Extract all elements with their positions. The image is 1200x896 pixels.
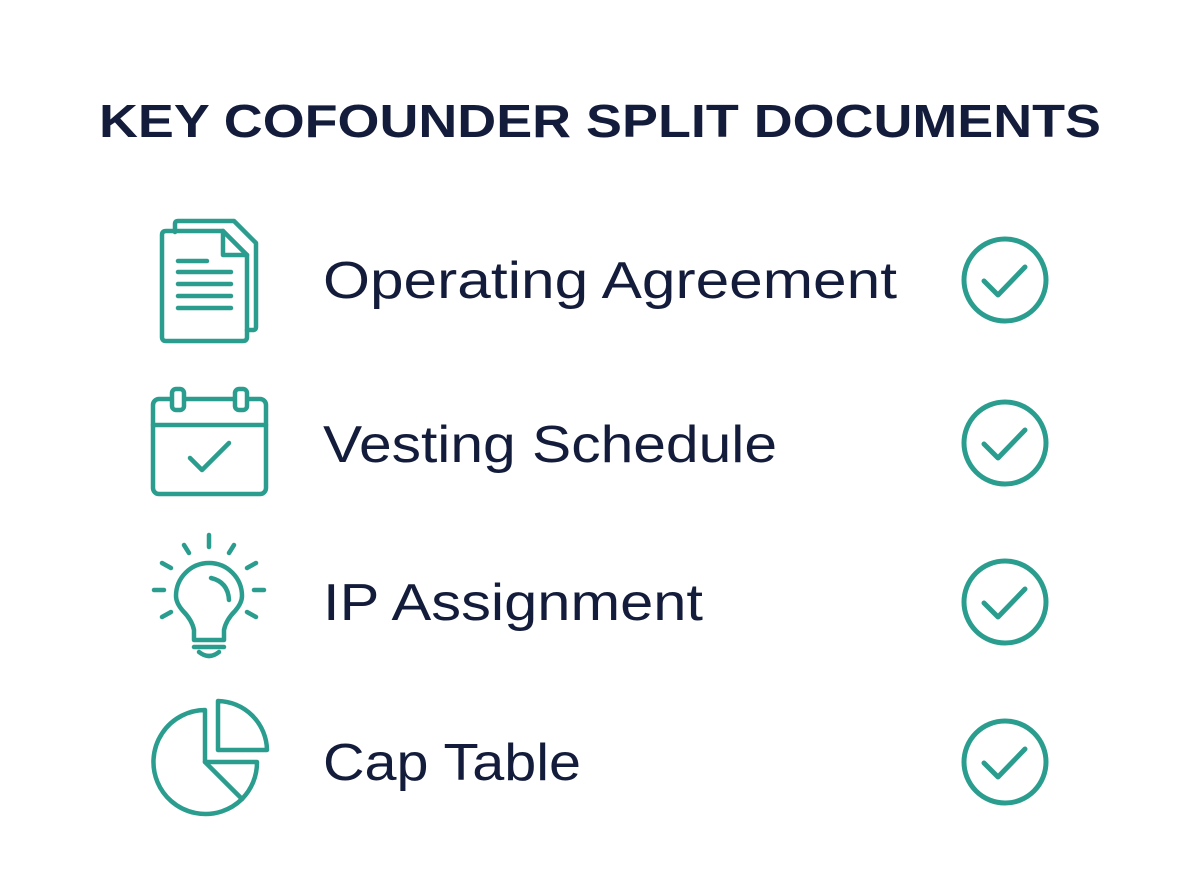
icon: check circle xyxy=(964,239,1046,321)
row: operating agreement xyxy=(162,221,1046,341)
icon: pie chart xyxy=(153,701,267,814)
label text: Cap Table xyxy=(323,734,581,792)
row: cap table xyxy=(153,701,1046,814)
icon: light bulb xyxy=(154,535,264,656)
icon: check circle xyxy=(964,561,1046,643)
row: vesting schedule xyxy=(153,389,1046,494)
icon: check circle xyxy=(964,402,1046,484)
label text: IP Assignment xyxy=(323,574,704,632)
icon: documents xyxy=(162,221,256,341)
icon: check circle xyxy=(964,721,1046,803)
label text: Vesting Schedule xyxy=(323,416,777,474)
icon: calendar xyxy=(153,389,266,494)
label text: Operating Agreement xyxy=(323,252,898,310)
row: ip assignment xyxy=(154,535,1046,656)
title: KEY COFOUNDER SPLIT DOCUMENTS xyxy=(99,95,1101,147)
